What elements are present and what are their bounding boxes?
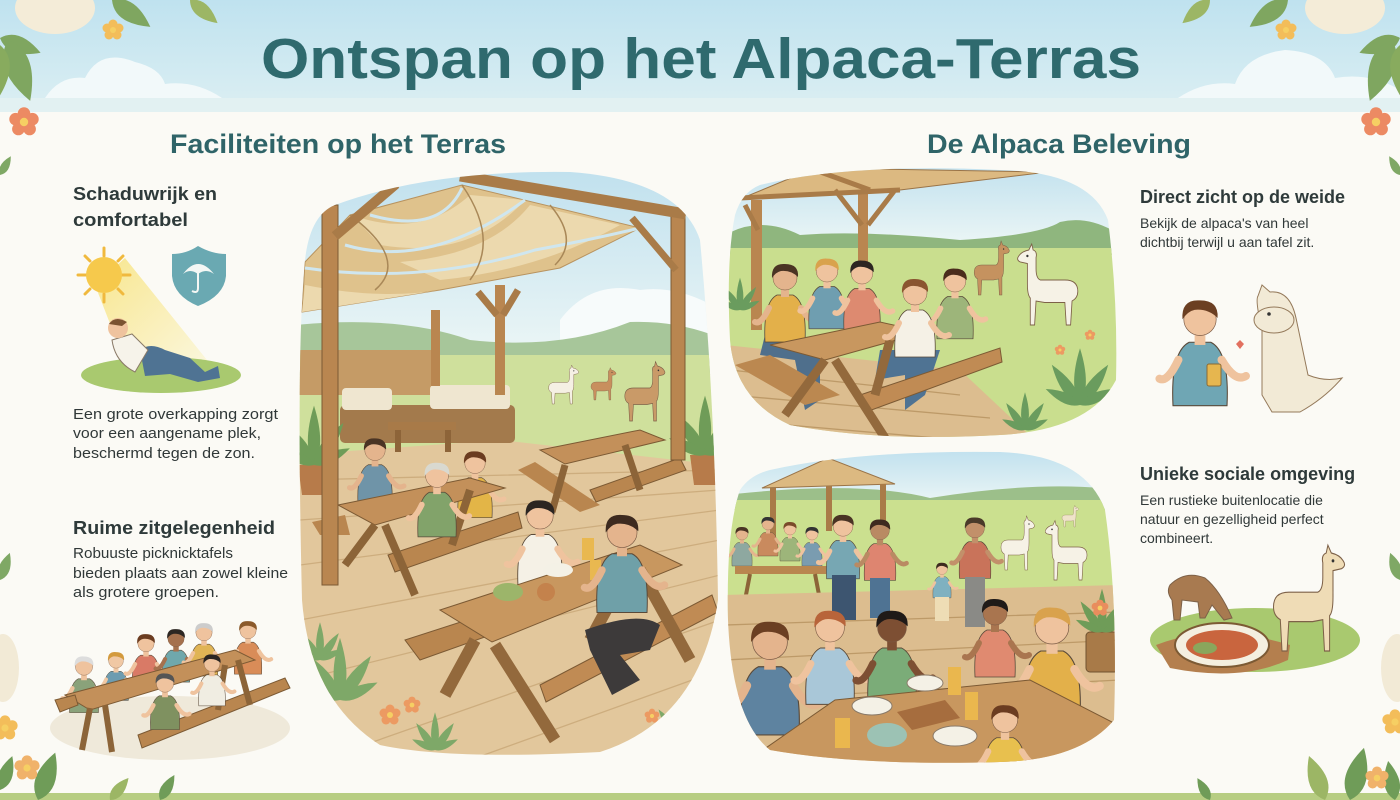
hills [725,486,1120,510]
left block: shade heading: comfortabel [73,209,188,230]
rear table [518,430,686,512]
man in teal shirt [584,515,664,695]
panel: meadow view [719,160,1125,445]
meadow [725,500,1125,620]
alpacas in meadow [549,365,579,404]
right block: social heading: Unieke sociale omgeving [1140,464,1355,484]
pergola [740,168,1048,330]
dining table [760,667,1112,765]
deck [295,440,720,760]
corner foliage top left [0,0,222,105]
left block: shade text: voor een aangename plek, [73,425,261,442]
guests at left table [350,438,404,505]
deck [725,585,1120,765]
fence [298,350,433,395]
sky [301,172,706,342]
illustration: group at long table [50,621,290,760]
meadow [295,355,725,475]
gazebo [762,458,895,538]
sky [732,168,1109,240]
guests at front table [507,500,577,586]
left block: shade text: Een grote overkapping zorgt [73,406,279,423]
left block: seating text: Robuuste picknicktafels [73,545,233,562]
meadow plants [719,278,1116,433]
right block: social text: combineert. [1140,530,1213,546]
picnic table [735,322,1002,438]
alpacas [1001,516,1034,570]
left block: seating text: bieden plaats aan zowel kleine [73,565,288,582]
corner foliage top right [1178,0,1400,105]
illustration: relaxing in the shade [78,248,241,393]
illustration: alpacas and platter [1150,545,1360,673]
standing guests [818,515,1002,627]
icon: umbrella shield [172,246,226,306]
right block: social text: Een rustieke buitenlocatie die [1140,492,1323,508]
header banner [0,0,1400,112]
left block: shade heading: Schaduwrijk en [73,183,217,204]
right block: social text: natuur en gezelligheid perfect [1140,511,1324,527]
pots [300,396,716,495]
left block: seating heading: Ruime zitgelegenheid [73,517,275,538]
side flowers and leaves [0,107,1400,739]
lounge sofa [340,385,515,452]
illustration: man and alpaca [1160,285,1342,412]
left block: shade text: beschermd tegen de zon. [73,445,255,462]
right block: view text: Bekijk de alpaca's van heel [1140,215,1308,231]
woman in yellow [978,705,1032,762]
overhead structure [302,176,686,585]
panel: social gathering [728,452,1115,763]
title: Ontspan op het Alpaca-Terras [261,27,1141,91]
barrel planter [1076,589,1115,672]
sky [739,452,1092,498]
meadow [725,248,1125,443]
right block: view heading: Direct zicht op de weide [1140,187,1345,207]
panel: main terrace scene [300,172,718,755]
left table [312,478,522,595]
section heading: alpaca experience: De Alpaca Beleving [927,129,1191,159]
foreground plants [308,622,680,750]
deck [730,346,1026,437]
foreground guests [726,599,1100,735]
background crowd [728,517,826,594]
section heading: facilities: Faciliteiten op het Terras [170,129,506,159]
right block: view text: dichtbij terwijl u aan tafel zit. [1140,234,1314,250]
guests [760,335,940,410]
front table [405,538,718,740]
left block: shade text [73,406,279,462]
left block: seating text: als grotere groepen. [73,584,219,601]
hills [295,322,725,375]
tree line [725,220,1120,255]
left block: shade heading [73,183,217,230]
bottom foliage [0,745,1400,800]
alpacas [974,241,1009,295]
left block: seating text [73,545,288,601]
